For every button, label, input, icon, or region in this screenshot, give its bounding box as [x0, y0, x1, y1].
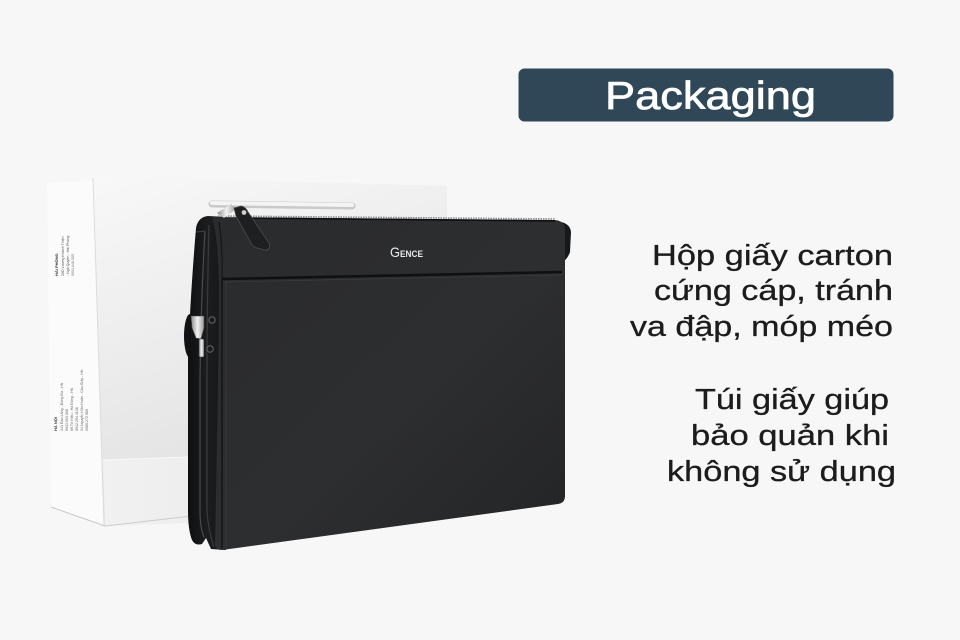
printed address: Ha Noi: 143 Đào Lãng - Đống Đa - HN: [60, 382, 64, 431]
printed address: Ha Noi: 0933.003.008: [65, 409, 69, 431]
side zipper hardware: [191, 316, 215, 357]
paper bag: [47, 176, 447, 526]
front leather panel: [212, 217, 565, 550]
text block: carton box: cứng cáp, tránh: [654, 275, 893, 307]
printed address: Hai Phong: - Ngô Quyền - Hải Phòng: [66, 236, 70, 276]
printed address: Hai Phong: [54, 236, 75, 276]
text block: carton box: Hộp giấy carton: [652, 240, 893, 272]
heading badge: [518, 68, 894, 122]
paper bag front panel: [93, 176, 447, 526]
text block: paper bag: [667, 384, 896, 488]
paper bag bottom fold: [103, 448, 447, 526]
rear strap: [555, 221, 571, 262]
printed address: Ha Noi: 69 Tô Hiệu - Hà Đông - HN: [70, 387, 74, 431]
text block: paper bag: không sử dụng: [667, 456, 896, 488]
text block: paper bag: Túi giấy giúp: [695, 384, 889, 416]
black document bag: [184, 204, 571, 550]
paper bag side panel: [47, 180, 104, 526]
printed address: Ha Noi: HÀ NỘI: [53, 417, 58, 431]
brand logo: GENCE: [390, 244, 423, 260]
zipper leather tab: [234, 206, 270, 250]
vertical stitching: [221, 280, 223, 548]
text block: paper bag: bảo quản khi: [691, 420, 889, 452]
top zipper: [218, 216, 555, 219]
zipper pull metal: [217, 204, 236, 218]
heading text: Packaging: [605, 75, 816, 118]
gusset fold lines: [196, 225, 214, 547]
text block: carton box: va đập, móp méo: [630, 311, 893, 343]
top flap seam: [222, 272, 562, 279]
printed address: Hai Phong: 19D Lương Khánh Thiện: [61, 236, 65, 276]
printed address: Ha Noi: 0942.294.1138: [75, 407, 79, 431]
paper bag handle: [212, 203, 352, 206]
printed address: Ha Noi: 0985.272.989: [85, 409, 89, 431]
printed address: Hai Phong: HẢI PHÒNG: [54, 253, 59, 276]
printed address: Ha Noi: 34 Nguyễn Hữu Huân - Cầu Giấy - HN: [79, 369, 84, 431]
left gusset: [188, 216, 226, 550]
printed address: Ha Noi: [53, 369, 89, 431]
side ring: [184, 314, 196, 358]
printed address: Hai Phong: 0901.648.555: [71, 254, 75, 276]
badge background: [518, 68, 894, 122]
text block: carton box: [630, 240, 893, 343]
